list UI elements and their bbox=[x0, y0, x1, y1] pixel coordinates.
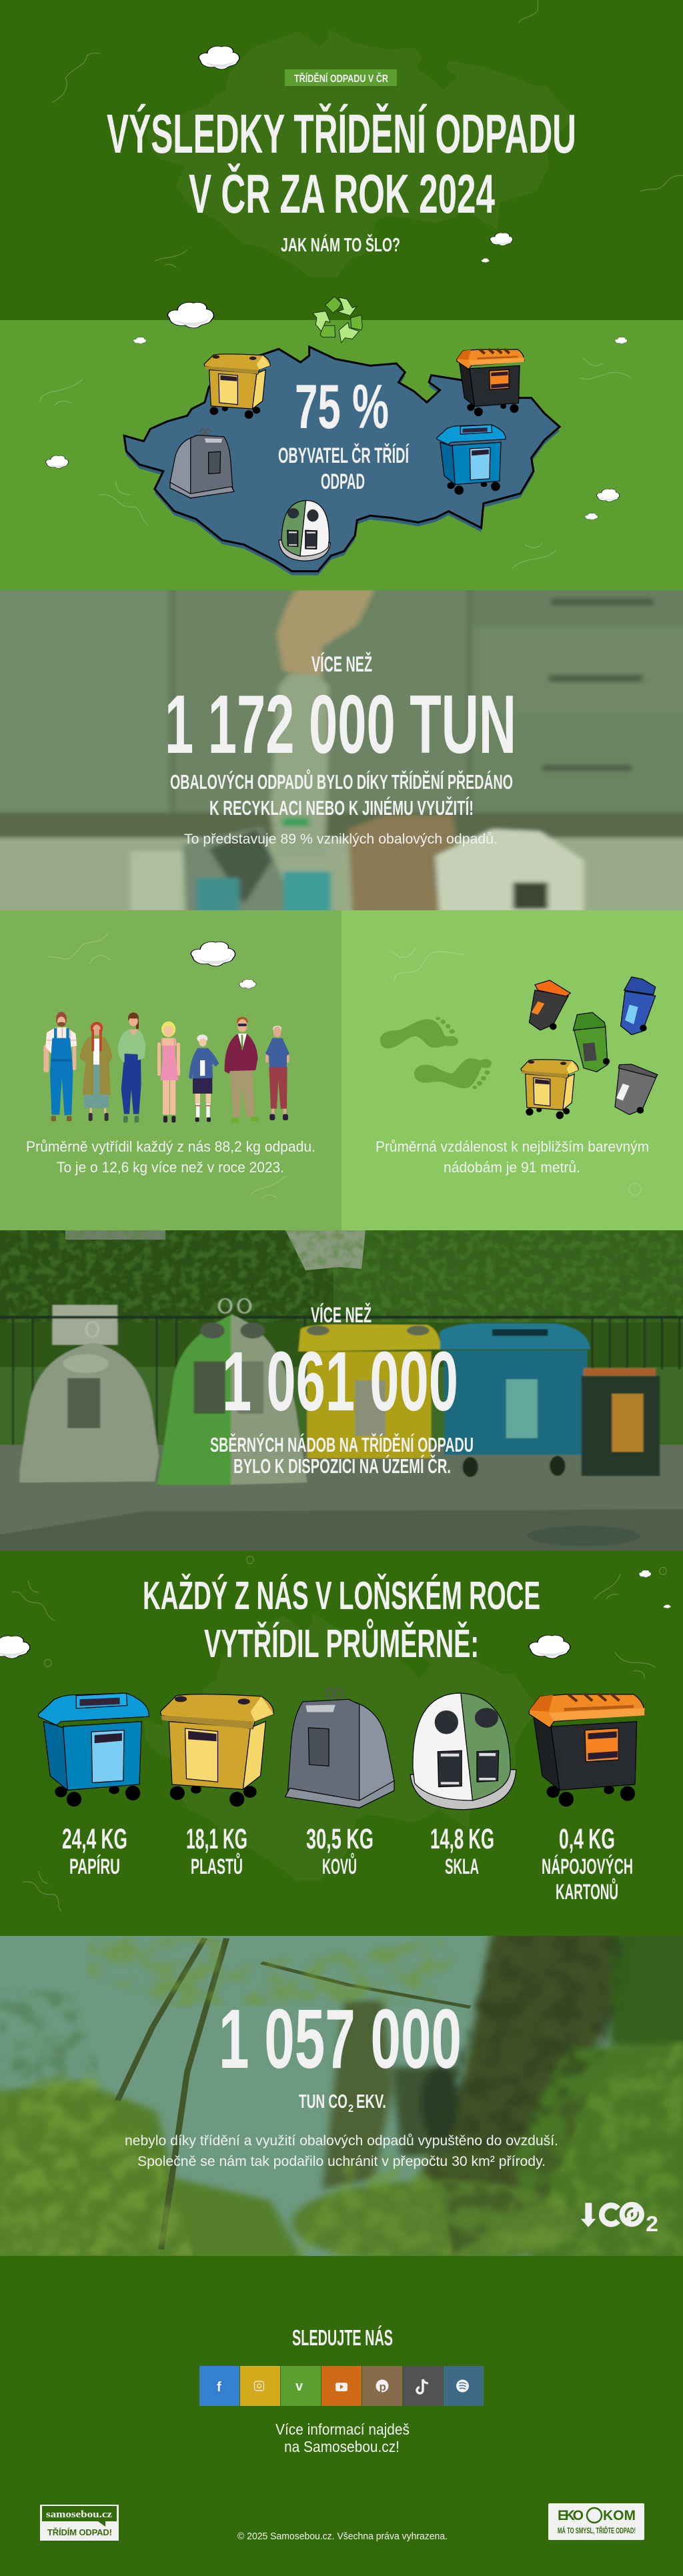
photo: bins in a row bbox=[0, 1230, 683, 1556]
label bbox=[542, 1854, 633, 1904]
panel: 75 percent map bbox=[0, 297, 683, 590]
tag bbox=[285, 69, 397, 86]
text: more information bbox=[275, 2421, 410, 2455]
logo: samosebou.cz: samosebou.cz bbox=[46, 2509, 112, 2520]
icon: blue bin bbox=[437, 425, 506, 495]
title bbox=[107, 103, 576, 225]
cloud bbox=[490, 233, 513, 245]
logo: EKO-KOM bbox=[548, 2503, 644, 2540]
foliage texture bbox=[0, 1987, 100, 2094]
column: glass bbox=[410, 1693, 516, 1878]
text: more information: na Samosebou.cz! bbox=[284, 2438, 400, 2455]
value: 24,4 KG bbox=[62, 1823, 127, 1855]
cloud bbox=[615, 337, 627, 344]
social icons bbox=[199, 2366, 484, 2406]
cloud bbox=[0, 1636, 30, 1658]
unit: EKV. bbox=[356, 2091, 386, 2113]
icon: pinterest: p bbox=[379, 2381, 386, 2393]
stat caption: OBYVATEL ČR TŘÍDÍ bbox=[278, 443, 410, 467]
column: beverage cartons bbox=[529, 1693, 644, 1904]
icon: grey wheelie bin bbox=[615, 1064, 658, 1115]
label: PLASTŮ bbox=[191, 1853, 243, 1878]
text: more information: Více informací najdeš bbox=[275, 2421, 410, 2438]
squiggles bbox=[52, 0, 683, 268]
icon: vimeo bbox=[281, 2366, 321, 2406]
stat caption: ODPAD bbox=[321, 469, 365, 493]
panel: distance to bins bbox=[342, 910, 683, 1230]
subtitle: JAK NÁM TO ŠLO? bbox=[281, 233, 400, 256]
panel: average sorted per person bbox=[0, 910, 342, 1230]
icon: CO2 reduction bbox=[580, 2202, 658, 2231]
icon: yellow bin bbox=[521, 1060, 578, 1119]
squiggles bbox=[392, 948, 641, 1195]
icon: facebook: f bbox=[217, 2380, 221, 2395]
stat: 75 percent: 75 % bbox=[295, 371, 389, 441]
map silhouette bbox=[143, 1613, 540, 1881]
cloud bbox=[191, 942, 235, 966]
person: man in burgundy blazer bbox=[225, 1017, 259, 1122]
logo: EKO-KOM: EKO bbox=[558, 2508, 584, 2523]
value: 18,1 KG bbox=[186, 1823, 247, 1855]
cloud bbox=[46, 455, 69, 468]
value: 0,4 KG bbox=[559, 1823, 615, 1855]
foliage texture bbox=[0, 2067, 193, 2256]
cloud bbox=[585, 513, 598, 520]
squiggles bbox=[48, 932, 285, 1199]
label: KARTONŮ bbox=[556, 1878, 618, 1904]
label: PAPÍRU bbox=[69, 1854, 120, 1878]
person: woman in green sweater bbox=[118, 1012, 145, 1122]
tag: TŘÍDĚNÍ ODPADU V ČR bbox=[294, 72, 388, 85]
cloud bbox=[239, 980, 256, 989]
label: VÍCE NEŽ bbox=[311, 652, 372, 676]
person: farmer bbox=[43, 1012, 77, 1121]
caption bbox=[211, 1434, 473, 1474]
icon: tiktok bbox=[403, 2366, 443, 2406]
logo: samosebou.cz bbox=[40, 2505, 119, 2541]
caption: SBĚRNÝCH NÁDOB NA TŘÍDĚNÍ ODPADU bbox=[210, 1432, 474, 1456]
text bbox=[125, 2133, 558, 2169]
text bbox=[376, 1138, 649, 1176]
logo: samosebou.cz: TŘÍDÍM ODPAD! bbox=[47, 2527, 112, 2537]
text bbox=[26, 1138, 315, 1176]
icon: footprints bbox=[380, 1017, 492, 1089]
big number: 1 061 000 bbox=[222, 1334, 458, 1428]
cloud bbox=[167, 302, 213, 328]
unit: TUN CO bbox=[299, 2091, 348, 2113]
cloud bbox=[482, 258, 490, 263]
column: plastic bbox=[160, 1694, 273, 1878]
heading: VYTŘÍDIL PRŮMĚRNĚ: bbox=[204, 1618, 479, 1666]
column: paper bbox=[38, 1693, 149, 1878]
map silhouette bbox=[146, 29, 575, 277]
cloud bbox=[529, 1635, 570, 1658]
person: woman in olive coat bbox=[79, 1022, 113, 1121]
icon: instagram bbox=[240, 2366, 280, 2406]
icon: pinterest bbox=[362, 2366, 402, 2406]
caption: K RECYKLACI NEBO K JINÉMU VYUŽITÍ! bbox=[209, 796, 474, 820]
title: V ČR ZA ROK 2024 bbox=[189, 163, 495, 225]
icon: blue wheelie bin bbox=[621, 977, 656, 1035]
icon: blue bin bbox=[38, 1693, 149, 1806]
person: older man in blue shirt bbox=[265, 1026, 289, 1120]
icon: recycling bbox=[313, 297, 362, 343]
text: nádobám je 91 metrů. bbox=[444, 1159, 580, 1176]
icon: orange bin bbox=[529, 1693, 644, 1806]
label: KOVŮ bbox=[322, 1853, 357, 1878]
panel: photo of collection bins bbox=[0, 1230, 683, 1556]
panel: photo recycled tonnes bbox=[0, 585, 683, 922]
person: blonde woman in pink dress bbox=[157, 1022, 180, 1122]
note: To představuje 89 % vzniklých obalových odpadů. bbox=[184, 832, 498, 847]
icon: yellow bin bbox=[204, 354, 270, 419]
logo: EKO-KOM: KOM bbox=[603, 2508, 636, 2523]
panel: footer bbox=[0, 2256, 683, 2576]
illustration: bins bbox=[529, 977, 658, 1115]
text: To je o 12,6 kg více než v roce 2023. bbox=[57, 1159, 284, 1176]
heading bbox=[143, 1573, 540, 1666]
icon: orange wheelie bin bbox=[529, 980, 570, 1030]
icon: youtube bbox=[321, 2366, 362, 2406]
icon: yellow bin bbox=[160, 1694, 273, 1806]
stat caption bbox=[278, 443, 410, 493]
photo: hand dropping bottle bbox=[0, 585, 683, 922]
cloud bbox=[639, 1570, 651, 1578]
value: 14,8 KG bbox=[430, 1823, 494, 1855]
panel: photo of forest CO2 bbox=[0, 1929, 683, 2265]
big number: 1 057 000 bbox=[219, 1992, 462, 2086]
icon: green wheelie bin bbox=[573, 1012, 610, 1072]
foliage texture bbox=[87, 1937, 467, 2007]
squiggles bbox=[40, 358, 632, 569]
icon: grey bin bbox=[170, 429, 234, 498]
cloud bbox=[133, 337, 146, 344]
icon: grey bin bbox=[285, 1688, 394, 1808]
foliage texture bbox=[293, 2041, 683, 2256]
copyright: © 2025 Samosebou.cz. Všechna práva vyhrazena. bbox=[237, 2531, 448, 2542]
heading: SLEDUJTE NÁS bbox=[292, 2325, 393, 2350]
unit: 2 bbox=[348, 2103, 354, 2115]
text: Průměrná vzdálenost k nejbližším barevným bbox=[376, 1138, 649, 1155]
photo: forest bbox=[0, 1929, 683, 2265]
icon: CO2 reduction: 2 bbox=[646, 2212, 658, 2236]
squiggles bbox=[12, 1556, 666, 1911]
map of Czechia bbox=[124, 347, 560, 575]
text: Společně se nám tak podařilo uchránit v přepočtu 30 km² přírody. bbox=[137, 2154, 546, 2169]
text: nebylo díky třídění a využití obalových odpadů vypuštěno do ovzduší. bbox=[125, 2133, 558, 2149]
caption bbox=[171, 770, 512, 815]
icon: glass bin bbox=[410, 1693, 516, 1810]
logo: EKO-KOM: MÁ TO SMYSL, TŘIĎTE ODPAD! bbox=[558, 2525, 636, 2535]
caption: BYLO K DISPOZICI NA ÚZEMÍ ČR. bbox=[233, 1454, 451, 1478]
icon: spotify bbox=[444, 2366, 484, 2406]
icon: facebook bbox=[199, 2366, 239, 2406]
trunk texture bbox=[440, 1936, 623, 2255]
column: metal bbox=[285, 1688, 394, 1878]
icon: orange bin bbox=[457, 349, 524, 416]
value: 30,5 KG bbox=[306, 1823, 374, 1855]
text: Průměrně vytřídil každý z nás 88,2 kg odpadu. bbox=[26, 1138, 315, 1155]
cloud bbox=[664, 1604, 671, 1608]
label: SKLA bbox=[445, 1854, 479, 1878]
cloud bbox=[199, 46, 239, 69]
panel: sorted per person by material bbox=[0, 1550, 683, 1936]
icon: glass bin bbox=[279, 500, 330, 561]
person: older woman in blue jacket bbox=[189, 1034, 219, 1122]
label: VÍCE NEŽ bbox=[311, 1303, 372, 1327]
illustration: people bbox=[43, 1012, 289, 1122]
icon: vimeo: v bbox=[295, 2379, 303, 2394]
panel: header bbox=[0, 0, 683, 320]
cloud bbox=[597, 489, 620, 501]
